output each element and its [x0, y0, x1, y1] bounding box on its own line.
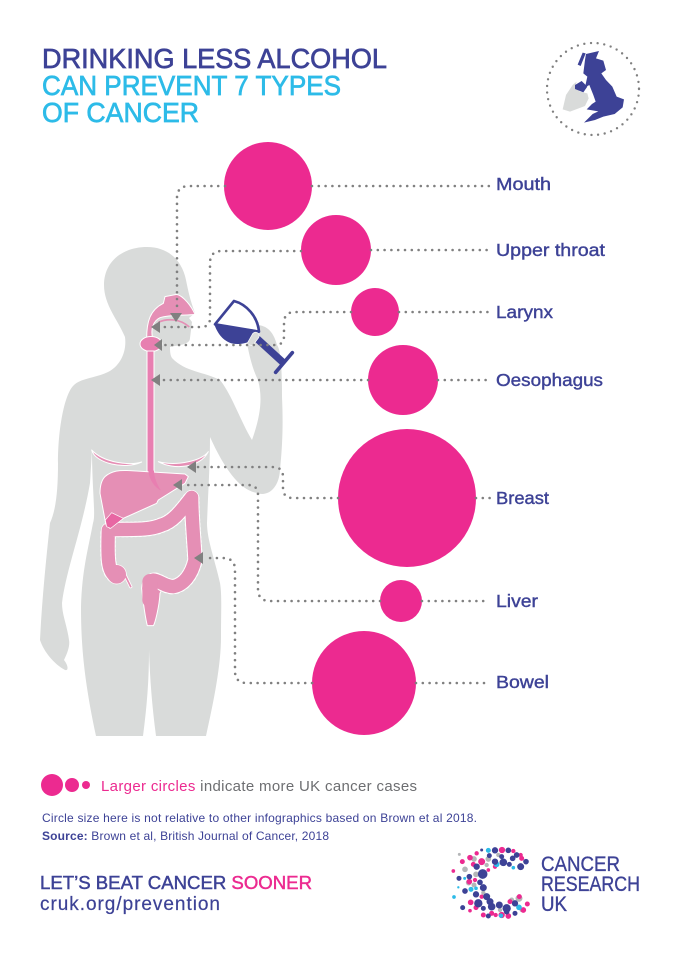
call to action: LET’S BEAT CANCER SOONER: [40, 873, 312, 893]
legend: [41, 774, 417, 796]
cancer type labels: Bowel: [496, 672, 549, 692]
logo wordmark: UK: [541, 893, 567, 916]
body silhouette: [40, 247, 283, 736]
oesophagus: [147, 351, 161, 497]
source note: [42, 811, 477, 843]
cancer type labels: Liver: [496, 591, 538, 611]
cancer type labels: Oesophagus: [496, 370, 603, 390]
title: [42, 43, 387, 128]
logo wordmark: RESEARCH: [541, 873, 640, 896]
legend: Larger circles indicate more UK cancer cases: [101, 778, 417, 795]
cancer type labels: Larynx: [496, 302, 553, 322]
icon: UK map in dotted circle: [547, 43, 639, 135]
pink circles: [224, 142, 476, 735]
source note: Source: Brown et al, British Journal of Cancer, 2018: [42, 829, 329, 843]
logo wordmark: [541, 853, 640, 916]
cancer type labels: Upper throat: [496, 240, 605, 260]
mouth and throat: [147, 294, 195, 338]
title: OF CANCER: [42, 97, 199, 128]
title: CAN PREVENT 7 TYPES: [42, 70, 341, 101]
call to action: cruk.org/prevention: [40, 894, 220, 915]
cancer type labels: Breast: [496, 488, 549, 508]
title: DRINKING LESS ALCOHOL: [42, 43, 387, 74]
organs: [92, 294, 208, 626]
source note: Circle size here is not relative to other infographics based on Brown et al 2018.: [42, 811, 477, 825]
cancer type labels: Mouth: [496, 174, 551, 194]
logo: Cancer Research UK: [452, 847, 640, 918]
liver: [100, 470, 188, 528]
dotted connector lines: [160, 186, 490, 683]
logo dots: [452, 847, 529, 918]
icon: wine glass and hand: [214, 301, 292, 372]
breasts: [92, 450, 208, 467]
call to action: [40, 873, 312, 915]
bowel: [107, 497, 195, 626]
logo wordmark: CANCER: [541, 853, 620, 876]
arrowheads: [151, 313, 203, 564]
cancer type labels: [496, 174, 605, 692]
larynx: [140, 336, 162, 352]
